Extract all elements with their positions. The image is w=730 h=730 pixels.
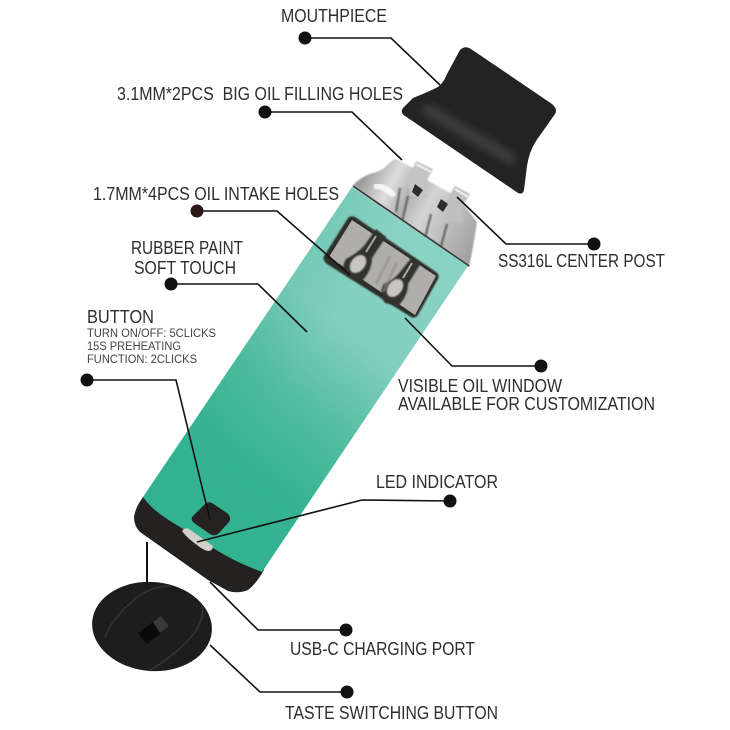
label: rubber paint soft touch: RUBBER PAINT xyxy=(131,238,243,258)
label: button instructions: TURN ON/OFF: 5CLICKS xyxy=(87,328,216,340)
leader: taste switching button xyxy=(210,645,354,698)
leader: oil intake holes xyxy=(190,204,350,275)
mouthpiece xyxy=(402,47,556,194)
label: button instructions xyxy=(87,307,216,366)
leader: rubber paint xyxy=(164,278,307,332)
leader: button xyxy=(80,374,210,520)
label: button instructions: FUNCTION: 2CLICKS xyxy=(87,354,197,366)
LED indicator strip xyxy=(182,528,213,551)
label: visible oil window: VISIBLE OIL WINDOW xyxy=(398,376,562,396)
device top: clear oil tank with pins xyxy=(353,159,477,267)
leader: mouthpiece xyxy=(298,32,440,85)
device body xyxy=(143,187,468,572)
label: button instructions: BUTTON xyxy=(87,307,154,327)
label: rubber paint soft touch xyxy=(131,238,243,278)
visible oil window xyxy=(323,216,439,318)
leader: oil filling holes xyxy=(258,106,402,160)
leader: center post xyxy=(457,197,600,250)
label: LED indicator: LED INDICATOR xyxy=(376,472,498,492)
label: button instructions: 15S PREHEATING xyxy=(87,341,181,353)
side button xyxy=(192,502,230,535)
leader: bottom cap connector xyxy=(146,542,148,585)
leader: LED indicator xyxy=(197,494,456,542)
label: taste switching button: TASTE SWITCHING BUTTON xyxy=(285,703,498,723)
label: rubber paint soft touch: SOFT TOUCH xyxy=(134,258,236,278)
leader: oil window xyxy=(405,318,548,372)
leader: USB-C port xyxy=(210,582,352,636)
label: mouthpiece: MOUTHPIECE xyxy=(281,6,387,26)
label: oil filling holes: 3.1MM*2PCS BIG OIL FILLING HOLES xyxy=(117,84,403,104)
label: oil intake holes: 1.7MM*4PCS OIL INTAKE HOLES xyxy=(93,184,339,204)
label: USB-C charging port: USB-C CHARGING PORT xyxy=(290,639,475,659)
label: center post: SS316L CENTER POST xyxy=(498,251,665,271)
device base xyxy=(134,497,264,592)
label: visible oil window xyxy=(398,376,655,414)
bottom cap view xyxy=(88,577,216,676)
label: visible oil window: AVAILABLE FOR CUSTOMIZATION xyxy=(398,394,655,414)
